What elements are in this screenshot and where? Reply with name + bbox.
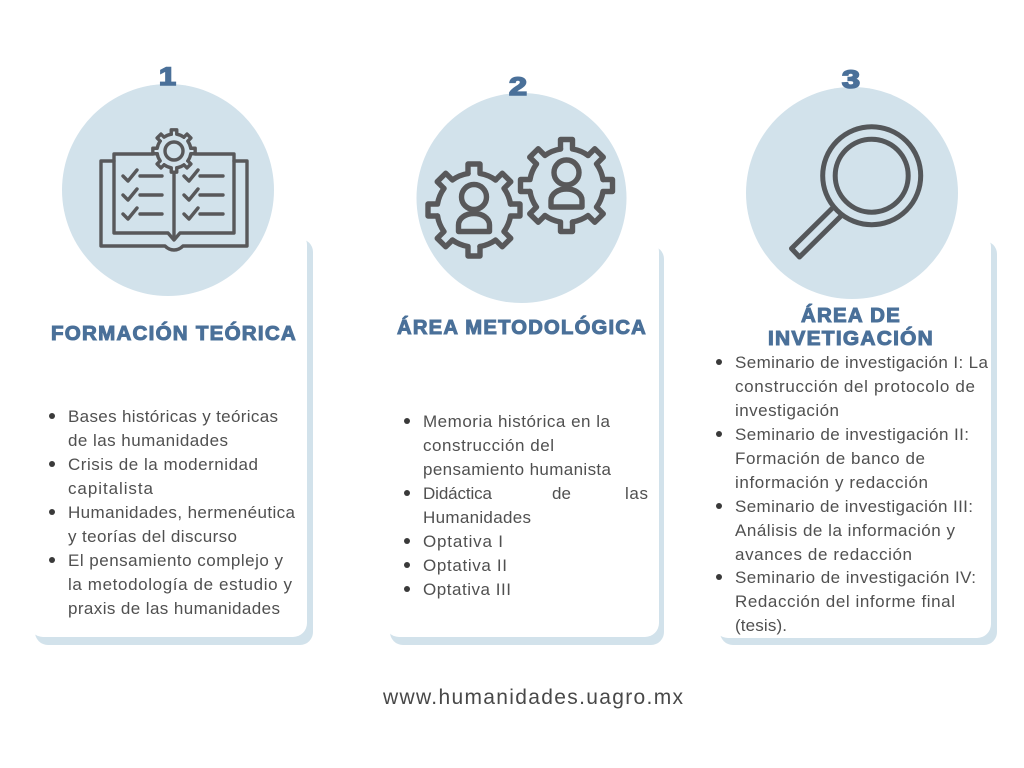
list: área metodológica: Optativa III — [423, 580, 511, 599]
list: formación teórica: Bases históricas y teóricas — [68, 407, 278, 426]
icon: open book with gear — [101, 129, 247, 250]
heading: área de investigación — [768, 304, 934, 350]
list: formación teórica: Humanidades, hermenéutica — [68, 503, 296, 522]
list: área de investigación: Redacción del informe final — [735, 592, 955, 611]
list: área metodológica: de — [552, 484, 571, 503]
list: área de investigación: investigación — [735, 401, 839, 420]
list: formación teórica: Crisis de la modernidad — [68, 455, 258, 474]
list: formación teórica: El pensamiento complejo y — [68, 551, 284, 570]
circle 1 — [62, 84, 274, 296]
number 3: 3 — [842, 66, 860, 94]
circle 3 — [746, 87, 958, 299]
list: área metodológica: pensamiento humanista — [423, 460, 612, 479]
list: área de investigación: Análisis de la información y — [735, 521, 956, 540]
list: área de investigación: avances de redacción — [735, 545, 912, 564]
number 1: 1 — [159, 63, 176, 91]
panel: área de investigación — [714, 66, 997, 645]
number 2: 2 — [509, 73, 527, 101]
heading: área metodológica: ÁREA METODOLÓGICA — [397, 315, 647, 339]
circle 2 — [416, 93, 626, 303]
list: área metodológica: Optativa II — [423, 556, 507, 575]
list: formación teórica — [49, 407, 296, 618]
list: área de investigación: Seminario de investigación III: — [735, 497, 973, 516]
heading: formación teórica: FORMACIÓN TEÓRICA — [51, 321, 297, 345]
list: área metodológica: Didáctica — [423, 484, 493, 503]
list: formación teórica: y teorías del discurso — [68, 527, 237, 546]
card shadow 1 — [35, 239, 313, 645]
list: área metodológica: Memoria histórica en la — [423, 412, 611, 431]
list: área metodológica: Optativa I — [423, 532, 503, 551]
list: formación teórica: praxis de las humanidades — [68, 599, 280, 618]
list: área metodológica — [404, 412, 648, 599]
icon: gears with people — [426, 138, 614, 258]
card shadow 3 — [720, 241, 997, 645]
list: área de investigación: Seminario de investigación I: La — [735, 353, 989, 372]
list: área metodológica: Humanidades — [423, 508, 531, 527]
list: área de investigación: Seminario de investigación II: — [735, 425, 969, 444]
list: área de investigación: información y redacción — [735, 473, 928, 492]
card 3 — [714, 233, 991, 638]
list: formación teórica: capitalista — [68, 479, 154, 498]
list: área de investigación: construcción del protocolo de — [735, 377, 975, 396]
icon: magnifying glass — [792, 127, 921, 257]
list: área metodológica: construcción del — [423, 436, 554, 455]
list: área metodológica: las — [625, 484, 648, 503]
heading: área de investigación: ÁREA DE — [801, 304, 901, 327]
list: formación teórica: de las humanidades — [68, 431, 228, 450]
list: área de investigación: Formación de banco de — [735, 449, 925, 468]
list: área de investigación: Seminario de investigación IV: — [735, 568, 976, 587]
list: área de investigación: (tesis). — [735, 616, 787, 635]
footer url: www.humanidades.uagro.mx — [382, 686, 684, 709]
list: formación teórica: la metodología de estudio y — [68, 575, 292, 594]
panel: formación teórica — [29, 63, 313, 645]
list: área de investigación — [716, 353, 989, 635]
card 2 — [385, 238, 659, 637]
card 1 — [29, 231, 307, 637]
heading: área de investigación: INVETIGACIÓN — [768, 326, 934, 350]
card shadow 2 — [390, 246, 664, 645]
panel: área metodológica — [385, 73, 664, 645]
